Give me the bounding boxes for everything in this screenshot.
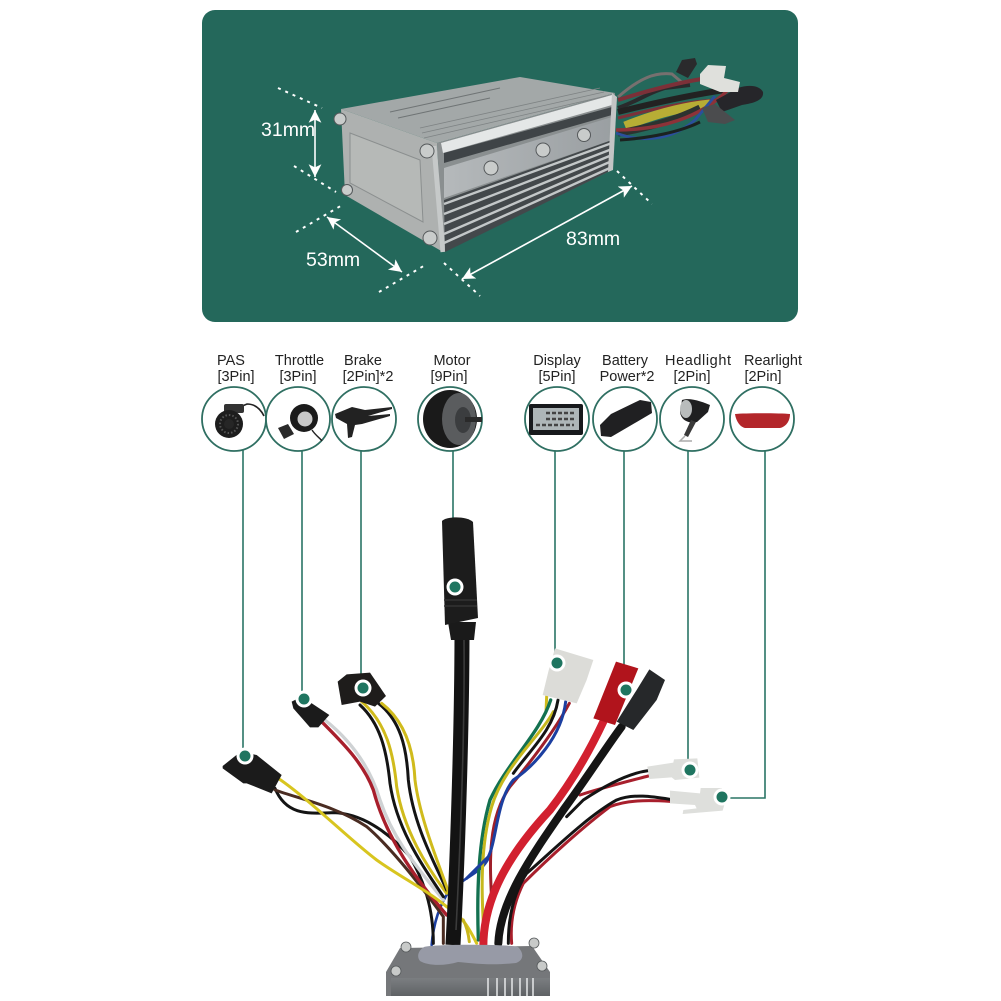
label: Motor: [9Pin]: [430, 369, 468, 385]
panel: controller dimensions: [202, 10, 798, 322]
label: Battery Power: Power*2: [600, 369, 654, 385]
icon: brake lever: [332, 387, 396, 451]
wire harness: [223, 517, 727, 947]
icon: battery: [593, 387, 657, 451]
connector: dark plug: [716, 86, 763, 112]
dimension: width 53mm: [296, 204, 427, 292]
label: Throttle: [3Pin]: [279, 369, 317, 385]
icon: rearlight: [730, 387, 794, 451]
connector: black upper plug: [676, 58, 697, 78]
connector: white plugs: [700, 65, 740, 92]
label: Rearlight: Rearlight: [744, 353, 802, 369]
connector: rearlight: [670, 788, 727, 814]
base screws: [391, 938, 547, 976]
label: Brake: Brake: [344, 353, 382, 369]
connector: PAS: [223, 752, 282, 793]
connector: battery red: [593, 662, 638, 725]
icon: display: [525, 387, 589, 451]
label: Display: [5Pin]: [538, 369, 576, 385]
label: Brake: [2Pin]*2: [343, 369, 393, 385]
label: Battery Power: Battery: [602, 353, 648, 369]
dimension: height 31mm: [261, 88, 336, 192]
right wires: display, battery, lights: [467, 648, 727, 947]
icon: headlight: [660, 387, 724, 451]
label: PAS: PAS: [217, 353, 245, 369]
label: Motor: Motor: [433, 353, 471, 369]
connector: headlight: [647, 758, 699, 780]
leader lines: [243, 448, 765, 798]
label: PAS: [3Pin]: [217, 369, 255, 385]
connector: throttle: [292, 697, 329, 727]
potting compound: [418, 945, 522, 965]
label: Headlight: Headlight: [665, 353, 731, 369]
icon: motor: [418, 387, 482, 451]
label: Throttle: Throttle: [275, 353, 324, 369]
icon: PAS sensor: [202, 387, 266, 451]
screws: [334, 113, 590, 245]
label: Headlight pins: [2Pin]: [673, 369, 711, 385]
dimension: length 83mm: [444, 171, 652, 296]
dimension: height 31mm: 31mm: [261, 119, 315, 141]
dimension: width 53mm: 53mm: [306, 249, 360, 271]
dimension: length 83mm: 83mm: [566, 228, 620, 250]
icon: throttle: [266, 387, 330, 451]
connector: lower clip: [702, 104, 735, 124]
connector: battery black: [617, 669, 665, 730]
motor cable and connector: [442, 517, 478, 945]
left wires: PAS, throttle, brake: [223, 673, 492, 945]
label: Rearlight: [2Pin]: [744, 369, 782, 385]
connection markers: [236, 578, 730, 806]
controller wires at rear: [616, 58, 763, 140]
controller body: [334, 77, 617, 252]
label: Display: Display: [533, 353, 581, 369]
connector: display: [543, 648, 593, 703]
connector: brake: [338, 673, 386, 707]
controller base: [386, 938, 550, 996]
